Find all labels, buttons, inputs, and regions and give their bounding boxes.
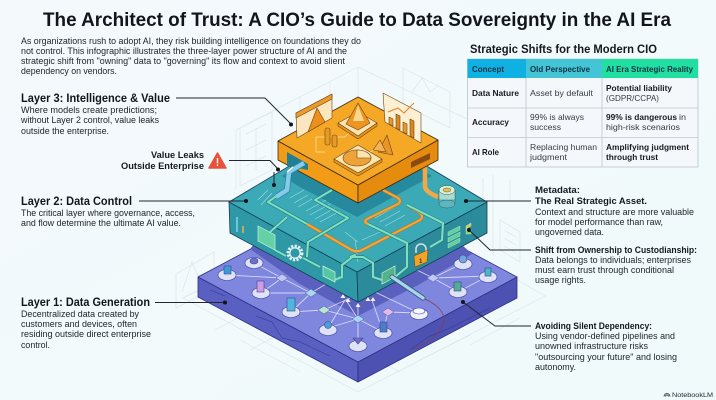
device nodes <box>218 255 497 352</box>
up arrows <box>340 294 376 307</box>
header labels: AI Era Strategic Reality <box>606 65 694 74</box>
hub diamonds <box>276 274 439 323</box>
slab left face <box>229 202 358 302</box>
row: data nature: Potential liability <box>606 83 672 93</box>
row: accuracy <box>472 112 686 132</box>
callout: layer 1: Decentralized data created by <box>21 309 139 319</box>
leader: layer 1 <box>155 300 227 304</box>
callout: layer 3: Layer 3: Intelligence & Value <box>21 91 170 105</box>
callout: silent dependency: autonomy. <box>535 362 576 372</box>
callout: metadata: ungoverned data. <box>535 227 604 237</box>
callout: metadata <box>535 185 694 237</box>
slab right face <box>357 202 487 302</box>
slab right face <box>358 140 438 203</box>
intro text: dependency on vendors. <box>21 66 117 76</box>
blue layer 1 slab <box>198 192 517 382</box>
callout: layer 1 <box>21 295 151 350</box>
row: accuracy: 99% is always <box>530 112 584 122</box>
icon: padlock <box>414 244 428 267</box>
circuit traces <box>258 190 405 262</box>
callout: layer 2: Layer 2: Data Control <box>21 194 132 208</box>
surface cracks <box>210 290 490 356</box>
callout: silent dependency: Using vendor-defined pipelines and <box>535 331 675 341</box>
row: data nature: Data Nature <box>472 88 519 98</box>
callout: layer 2: and flow determine the ultimate AI value. <box>21 218 181 228</box>
row: data nature: Asset by default <box>530 88 594 98</box>
icon: gear <box>288 246 302 260</box>
callout: silent dependency: Avoiding Silent Dependency: <box>535 321 652 331</box>
row: ai role <box>472 142 689 162</box>
callout: layer 1: residing outside direct enterprise <box>21 329 151 339</box>
leader: custodianship <box>467 228 531 250</box>
right port <box>411 153 430 168</box>
row: ai role: judgment <box>529 152 568 162</box>
callout: layer 3: without Layer 2 control, value leaks <box>20 115 159 125</box>
surface lines <box>316 130 375 162</box>
callout: custodianship: usage rights. <box>535 275 586 285</box>
teal layer 2 slab <box>229 125 487 350</box>
panel: right bar chart <box>383 93 421 143</box>
cylinders <box>325 128 337 147</box>
left port <box>287 152 308 170</box>
callout: value leaks <box>121 150 204 171</box>
small mountains <box>373 135 393 155</box>
panel: left dashboard <box>296 94 332 138</box>
callout: metadata: for model performance than raw, <box>535 217 663 227</box>
callout: layer 3: outside the enterprise. <box>21 126 109 136</box>
slab left face <box>198 277 358 382</box>
callout: custodianship: Data belongs to individuals; enterprises <box>535 255 691 265</box>
intro text: As organizations rush to adopt AI, they risk building intelligence on foundations they do <box>21 36 361 46</box>
callout: layer 1: customers and devices, often <box>21 319 137 329</box>
orange layer 3 slab <box>276 93 438 203</box>
database cylinder <box>439 186 455 208</box>
title: The Architect of Trust: A CIO’s Guide to Data Sovereignty in the AI Era <box>43 9 671 31</box>
callout: metadata: The Real Strategic Asset. <box>535 196 647 206</box>
row: data nature: (GDPR/CCPA) <box>606 93 659 103</box>
callout: custodianship: Shift from Ownership to Custodianship: <box>535 245 697 255</box>
callout: layer 2: The critical layer where governance, access, <box>21 208 195 218</box>
row: accuracy: 99% is dangerous <box>606 112 677 122</box>
leader: value leaks <box>229 160 280 187</box>
leader: silent dependency <box>461 300 531 326</box>
slab top face <box>198 192 517 362</box>
green data pipes <box>268 190 443 280</box>
callout: layer 3 <box>20 91 170 136</box>
row: accuracy: in <box>679 112 686 122</box>
callout: custodianship <box>535 245 697 285</box>
header labels: Old Perspective <box>530 65 591 74</box>
row: accuracy: Accuracy <box>472 117 509 127</box>
pyramid platform <box>338 103 377 139</box>
callout: metadata: Context and structure are more valuable <box>535 207 694 217</box>
intro text <box>21 36 361 76</box>
header labels <box>472 65 694 74</box>
shadow of control layer <box>250 225 472 316</box>
callout: silent dependency: unowned infrastructure risks <box>535 341 648 351</box>
row: accuracy: high-risk scenarios <box>606 122 680 132</box>
data tube <box>392 277 444 350</box>
shadow of intelligence layer <box>282 130 432 217</box>
table heading: Strategic Shifts for the Modern CIO <box>470 42 657 56</box>
leader: metadata <box>464 199 531 203</box>
callout: layer 3: Where models create predictions; <box>21 105 157 115</box>
orange data pipe loop <box>307 190 422 251</box>
callout: layer 1: Layer 1: Data Generation <box>21 295 150 309</box>
network lines <box>227 263 488 345</box>
intro text: strategic shift from "owning" data to "governing" its flow and context to avoid slient <box>21 56 345 66</box>
row: ai role: AI Role <box>472 147 499 157</box>
callout: custodianship: must earn trust through conditional <box>535 265 674 275</box>
header labels: Concept <box>472 65 504 74</box>
callout: silent dependency: "outsourcing your future" and losing <box>535 352 677 362</box>
background sketches <box>176 67 545 392</box>
NotebookLM badge: NotebookLM <box>672 392 713 399</box>
pie chart platform <box>334 145 382 176</box>
server rack <box>448 223 471 248</box>
slab right face <box>358 277 517 382</box>
slab top face <box>278 97 438 185</box>
row: ai role: Amplifying judgment <box>606 142 689 152</box>
row: data nature <box>472 83 672 103</box>
callout: value leaks: Outside Enterprise <box>121 161 204 171</box>
header cells <box>468 59 698 78</box>
row: ai role: through trust <box>606 152 658 162</box>
callout: layer 1: control. <box>21 340 50 350</box>
face modules <box>237 217 395 284</box>
row: accuracy: success <box>530 122 561 132</box>
slab top face <box>229 125 487 272</box>
leader: layer 3 <box>176 98 293 126</box>
callout: value leaks: Value Leaks <box>151 150 204 160</box>
icon: warning triangle <box>209 153 226 168</box>
icon: padlock: 1 <box>419 259 423 265</box>
callout: layer 2 <box>21 194 195 228</box>
table: strategic shifts <box>468 59 698 167</box>
blue pipe <box>276 163 304 197</box>
table body <box>468 59 698 167</box>
row: ai role: Replacing human <box>530 142 597 152</box>
leader: layer 2 <box>139 199 248 203</box>
slab left face <box>278 141 358 203</box>
orange pipe <box>414 162 438 197</box>
callout: metadata: Metadata: <box>535 185 580 195</box>
intro text: not control. This infographic illustrates the three-layer power structure of AI and the <box>21 46 347 56</box>
callout: silent dependency <box>535 321 677 372</box>
